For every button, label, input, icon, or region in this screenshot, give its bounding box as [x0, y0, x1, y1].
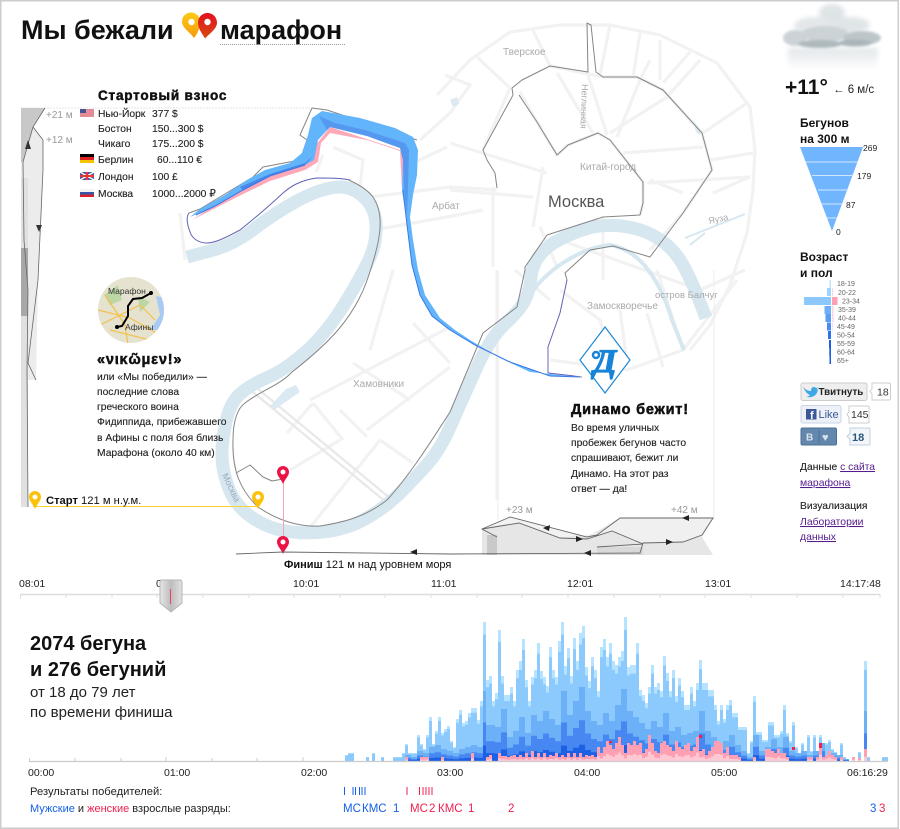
data source credits: данных [800, 532, 837, 543]
tweet button: Твитнуть [818, 387, 863, 398]
icon: Marathon to Athens mini map: Афины [125, 322, 153, 332]
clock time slider: 08:01 [19, 578, 45, 590]
tweet button: 18 [877, 386, 889, 398]
weather reading: +11° [785, 76, 828, 99]
adult category row: 2 [429, 803, 435, 815]
map: marathon route line [187, 23, 712, 526]
chart: runners per 300 m: 87 [846, 200, 856, 210]
data source credits: Данные с сайта [800, 462, 875, 473]
clock time slider: 09:01 [156, 578, 182, 590]
panel: entry fee table: 175...200 $ [152, 139, 204, 150]
clock time slider: 13:01 [705, 578, 731, 590]
text block: runner totals: по времени финиша [30, 704, 173, 721]
text block: Dynamo runs: Динамо бежит! [571, 402, 689, 418]
text block: Dynamo runs: пробежек бегунов часто [571, 437, 686, 449]
histogram time axis: 00:00 [28, 767, 54, 779]
title: марафон [220, 15, 342, 45]
finish marker and label [277, 466, 451, 571]
data source credits: марафона [800, 477, 851, 489]
panel: entry fee table: Нью-Йорк [98, 107, 146, 120]
panel: entry fee table: Стартовый взнос [98, 88, 227, 103]
data source credits: Лаборатории [800, 516, 864, 528]
winners results row [30, 786, 432, 798]
adult category row: 2 [508, 803, 514, 815]
facebook like button: f [810, 410, 814, 422]
map labels: Москва [220, 472, 242, 504]
vkontakte like button: В [806, 432, 813, 444]
text block: Dynamo runs: ответ — да! [571, 484, 627, 495]
bottom right elevation profile: +23 м [506, 505, 533, 516]
map labels: Замоскворечье [587, 301, 658, 312]
title [21, 15, 345, 45]
data source credits [800, 462, 875, 543]
left elevation profile: +12 м [46, 135, 73, 146]
adult category row: МС [410, 803, 428, 815]
adult category row: 1 [393, 803, 399, 815]
facebook like button: 145 [851, 409, 869, 421]
chart: runners per 300 m: 0 [836, 227, 841, 237]
map labels: Арбат [432, 200, 460, 212]
text block: nikomen: Марафона (около 40 км) [97, 447, 215, 459]
icon: Marathon to Athens mini map: Марафон [108, 286, 146, 296]
chart: finish time histogram [345, 617, 888, 761]
icon: Dynamo logo: Д [591, 344, 618, 380]
title: Мы бежали [21, 15, 174, 45]
left elevation profile: +21 м [46, 110, 73, 121]
left elevation profile [21, 108, 73, 507]
map labels: Хамовники [353, 379, 404, 390]
map labels: Тверское [503, 47, 546, 58]
facebook like button [801, 406, 869, 423]
bottom right elevation profile: +42 м [671, 505, 698, 516]
map: runner density band [190, 111, 580, 377]
text block: nikomen: последние слова [97, 387, 179, 398]
text block: nikomen: греческого воина [97, 402, 179, 413]
chart: runners per 300 m: на 300 м [800, 132, 850, 146]
chart: runners per 300 m: 179 [857, 171, 871, 181]
icon: two map pins logo [182, 12, 217, 38]
panel: entry fee table: Чикаго [98, 139, 131, 150]
map: thin runners line along river [187, 178, 575, 376]
adult category row: КМС [362, 803, 387, 815]
chart: age and sex pyramid: Возраст [800, 250, 848, 264]
bottom right elevation profile [236, 505, 714, 556]
text block: Dynamo runs [571, 402, 689, 495]
adult category row: Мужские и женские взрослые разряды: [30, 803, 231, 815]
panel: entry fee table [80, 88, 227, 200]
chart: age and sex pyramid: 23-34 [842, 298, 860, 306]
chart: age and sex pyramid: и пол [800, 266, 833, 280]
vkontakte like button: ♥ [822, 432, 829, 444]
histogram time axis [28, 757, 888, 779]
histogram time axis: 05:00 [711, 767, 737, 779]
text block: Dynamo runs: спрашивают, бежит ли [571, 452, 679, 464]
vkontakte like button [801, 428, 870, 445]
map labels: Неглинная [578, 84, 590, 129]
adult category row: МС [343, 803, 361, 815]
chart: age and sex pyramid: 45-49 [837, 324, 855, 331]
map labels: Яуза [707, 212, 729, 226]
data source credits: Визуализация [800, 501, 867, 512]
map labels [220, 47, 729, 504]
panel: entry fee table: 60...110 € [157, 155, 202, 166]
vkontakte like button: 18 [852, 432, 864, 444]
histogram time axis: 06:16:29 [847, 767, 888, 779]
icon: Dynamo logo [580, 327, 630, 393]
clock time slider: 14:17:48 [840, 578, 881, 590]
clock time slider: 12:01 [567, 578, 593, 590]
chart: age and sex pyramid: 35-39 [838, 307, 856, 314]
text block: nikomen: или «Мы победили» — [97, 371, 208, 383]
adult category row [30, 803, 885, 815]
map: ponds and canal details [270, 97, 701, 410]
histogram time axis: 01:00 [164, 767, 190, 779]
text block: nikomen: в Афины с поля боя близь [97, 432, 223, 444]
map labels: остров Балчуг [655, 290, 718, 301]
clock time slider: 11:01 [431, 578, 457, 590]
adult category row: КМС [438, 803, 463, 815]
chart: age and sex pyramid: 60-64 [837, 350, 855, 356]
histogram time axis: 03:00 [437, 767, 463, 779]
adult category row: 3 [879, 803, 885, 815]
text block: runner totals [30, 633, 173, 721]
weather reading: ← 6 м/с [833, 84, 874, 96]
clock time slider: 10:01 [293, 578, 319, 590]
text block: nikomen [97, 352, 227, 459]
start marker and label [29, 491, 264, 509]
icon: Marathon to Athens mini map [98, 277, 166, 345]
tweet button [801, 383, 890, 400]
histogram time axis: 04:00 [574, 767, 600, 779]
map labels: Китай-город [580, 162, 636, 173]
chart: age and sex pyramid: 20-22 [838, 290, 856, 297]
chart: age and sex pyramid: 18-19 [837, 281, 855, 288]
facebook like button: Like [818, 409, 839, 421]
map: street grid [20, 25, 755, 540]
chart: runners per 300 m: Бегунов [800, 116, 849, 130]
panel: entry fee table: 377 $ [152, 109, 178, 120]
adult category row: 3 [870, 803, 876, 815]
map: Moscow river [187, 187, 745, 533]
chart: age and sex pyramid: 65+ [837, 358, 849, 365]
text block: runner totals: от 18 до 79 лет [30, 684, 136, 701]
chart: age and sex pyramid: 55-59 [837, 341, 855, 348]
map labels: Москва [548, 193, 605, 211]
text block: Dynamo runs: Динамо. На этот раз [571, 469, 669, 480]
text block: Dynamo runs: Во время уличных [571, 423, 660, 434]
panel: entry fee table: 100 £ [152, 172, 178, 183]
weather reading [785, 76, 874, 99]
panel: entry fee table: Бостон [98, 124, 132, 135]
finish marker and label: Финиш 121 м над уровнем моря [284, 559, 451, 571]
panel: entry fee table: Берлин [98, 155, 133, 166]
adult category row: 1 [468, 803, 474, 815]
chart: age and sex pyramid: 40-44 [838, 316, 856, 322]
text block: nikomen: Фидиппида, прибежавшего [97, 416, 227, 428]
panel: entry fee table: Лондон [98, 172, 134, 183]
text block: runner totals: и 276 бегуний [30, 659, 166, 681]
panel: entry fee table: 150...300 $ [152, 124, 204, 135]
chart: runners per 300 m [800, 116, 877, 237]
clock time slider [19, 578, 881, 612]
text block: runner totals: 2074 бегуна [30, 633, 147, 655]
panel: entry fee table: Москва [98, 189, 133, 200]
panel: entry fee table: 1000...2000 ₽ [152, 189, 216, 200]
start marker and label: Старт 121 м н.у.м. [46, 495, 141, 507]
chart: age and sex pyramid [800, 250, 860, 365]
winners results row: Результаты победителей: [30, 786, 162, 798]
chart: age and sex pyramid: 50-54 [837, 332, 855, 340]
icon: rain cloud [783, 4, 881, 70]
histogram time axis: 02:00 [301, 767, 327, 779]
text block: nikomen: «νικῶμεν!» [97, 352, 182, 368]
chart: runners per 300 m: 269 [863, 143, 877, 153]
